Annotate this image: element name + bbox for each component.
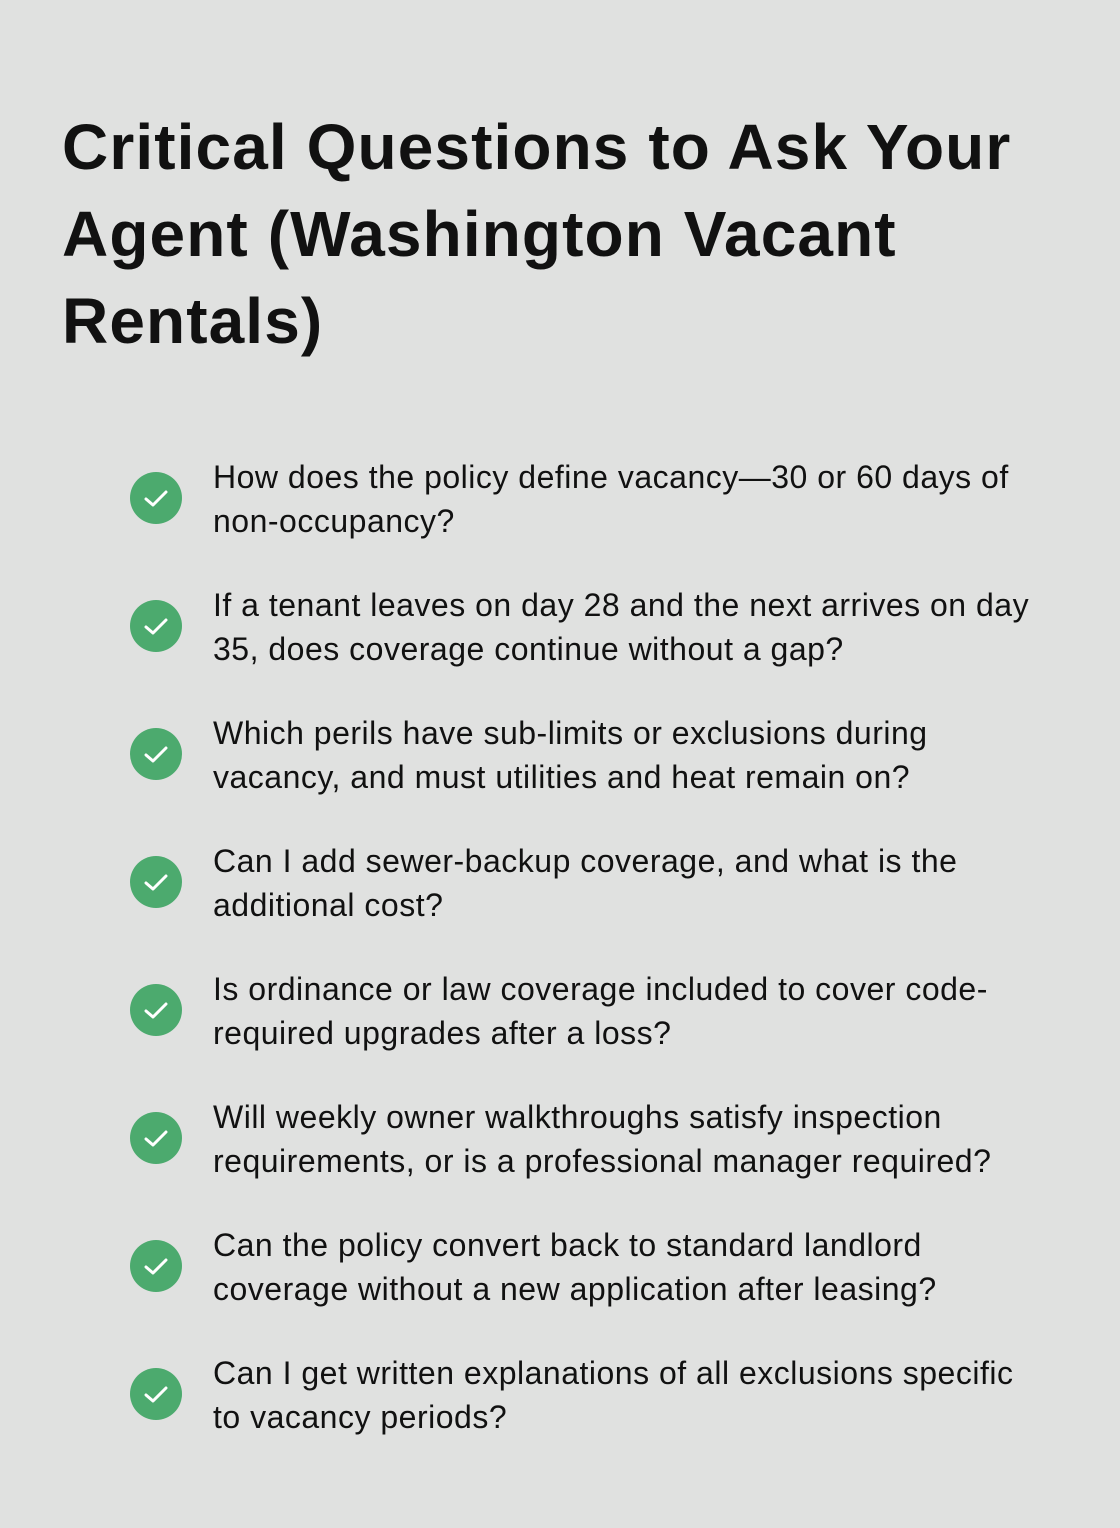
icon: check (130, 1112, 182, 1164)
text (213, 1099, 991, 1179)
item 3 (130, 715, 928, 795)
text: vacancy, and must utilities and heat remain on? (213, 759, 910, 795)
title (62, 111, 1011, 357)
text: Can I get written explanations of all exclusions specific (213, 1355, 1013, 1391)
icon: check (130, 856, 182, 908)
icon: check (130, 1368, 182, 1420)
icon: check (130, 472, 182, 524)
text: requirements, or is a professional manager required? (213, 1143, 991, 1179)
text: Can I add sewer-backup coverage, and what is the (213, 843, 957, 879)
text: Will weekly owner walkthroughs satisfy inspection (213, 1099, 942, 1135)
text: 35, does coverage continue without a gap? (213, 631, 844, 667)
icon: check (130, 1240, 182, 1292)
text (213, 715, 928, 795)
text: How does the policy define vacancy—30 or 60 days of (213, 459, 1009, 495)
text (213, 587, 1029, 667)
item 8 (130, 1355, 1013, 1435)
item 2 (130, 587, 1029, 667)
text (213, 1227, 937, 1307)
text: Which perils have sub-limits or exclusions during (213, 715, 928, 751)
icon: check (130, 984, 182, 1036)
text: If a tenant leaves on day 28 and the next arrives on day (213, 587, 1029, 623)
text: coverage without a new application after leasing? (213, 1271, 937, 1307)
title: Agent (Washington Vacant (62, 198, 897, 270)
text: to vacancy periods? (213, 1399, 507, 1435)
text (213, 971, 988, 1051)
item 1 (130, 459, 1009, 539)
text: non-occupancy? (213, 503, 455, 539)
item 4 (130, 843, 957, 923)
text: Is ordinance or law coverage included to cover code- (213, 971, 988, 1007)
text (213, 459, 1009, 539)
item 6 (130, 1099, 991, 1179)
title: Critical Questions to Ask Your (62, 111, 1011, 183)
icon: check (130, 600, 182, 652)
text (213, 1355, 1013, 1435)
item 5 (130, 971, 988, 1051)
text (213, 843, 957, 923)
icon: check (130, 728, 182, 780)
text: required upgrades after a loss? (213, 1015, 671, 1051)
text: additional cost? (213, 887, 443, 923)
text: Can the policy convert back to standard landlord (213, 1227, 922, 1263)
item 7 (130, 1227, 937, 1307)
title: Rentals) (62, 285, 323, 357)
